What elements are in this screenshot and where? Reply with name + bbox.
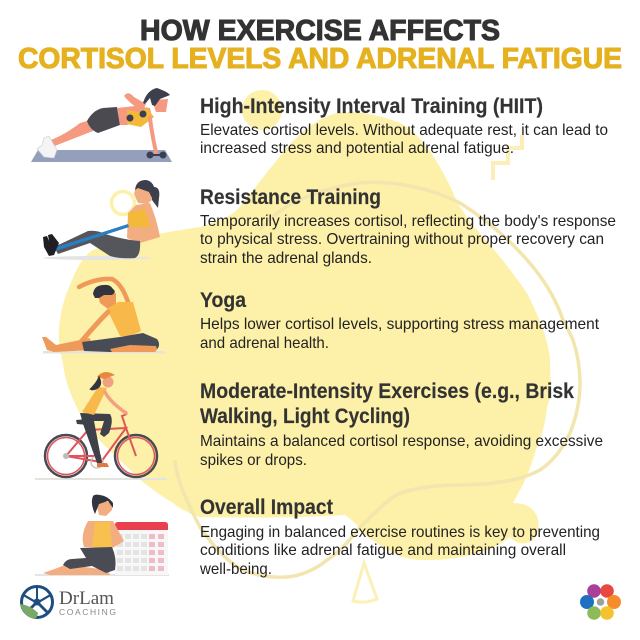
section: resistance training: to physical stress. Overtraining without proper recovery can (200, 231, 604, 248)
logo: DrLam Coaching (20, 586, 116, 619)
icon: woman riding a red bicycle (35, 372, 167, 480)
logo: DrLam Coaching: DrLam (59, 588, 114, 609)
icon: woman in seated twist with calendar (35, 495, 169, 576)
icon: woman doing plank row on mat (31, 88, 172, 162)
icon: woman seated with resistance band (43, 180, 160, 260)
section: HIIT (200, 95, 608, 157)
section: yoga: and adrenal health. (200, 335, 329, 352)
logo: colorful flower (580, 584, 621, 620)
section: moderate-intensity exercises: Moderate-Intensity Exercises (e.g., Brisk (200, 380, 574, 403)
icon: woman in yoga side stretch (42, 279, 165, 354)
section: HIIT: increased stress and potential adrenal fatigue. (200, 140, 514, 157)
section: resistance training (200, 186, 616, 267)
title (18, 15, 622, 75)
section: resistance training: Resistance Training (200, 186, 381, 209)
background yellow blob (59, 90, 551, 560)
section: resistance training: Temporarily increases cortisol, reflecting the body's response (200, 213, 616, 230)
section: moderate-intensity exercises: spikes or drops. (200, 452, 307, 469)
section: overall impact: conditions like adrenal fatigue and maintaining overall (200, 542, 566, 559)
background arc line (175, 182, 580, 577)
section: moderate-intensity exercises: Maintains a balanced cortisol response, avoiding excessive (200, 433, 603, 450)
logo: DrLam Coaching: COACHING (59, 607, 116, 617)
section: overall impact: well-being. (199, 561, 272, 578)
section: resistance training: strain the adrenal glands. (200, 250, 372, 267)
triangle decoration (353, 563, 377, 602)
section: HIIT: High-Intensity Interval Training (HIIT) (200, 95, 543, 118)
section: moderate-intensity exercises: Walking, Light Cycling) (200, 405, 410, 428)
zigzag decoration (493, 135, 522, 180)
section: yoga: Helps lower cortisol levels, supporting stress management (200, 316, 600, 333)
section: yoga (200, 289, 600, 352)
title: CORTISOL LEVELS AND ADRENAL FATIGUE (18, 43, 622, 75)
ring decoration (112, 192, 134, 214)
section: moderate-intensity exercises (200, 380, 603, 469)
title: HOW EXERCISE AFFECTS (140, 15, 500, 47)
section: overall impact: Overall Impact (200, 496, 333, 519)
section: overall impact (199, 496, 600, 578)
section: overall impact: Engaging in balanced exercise routines is key to preventing (200, 524, 600, 541)
section: yoga: Yoga (200, 289, 246, 312)
section: HIIT: Elevates cortisol levels. Without adequate rest, it can lead to (200, 122, 608, 139)
